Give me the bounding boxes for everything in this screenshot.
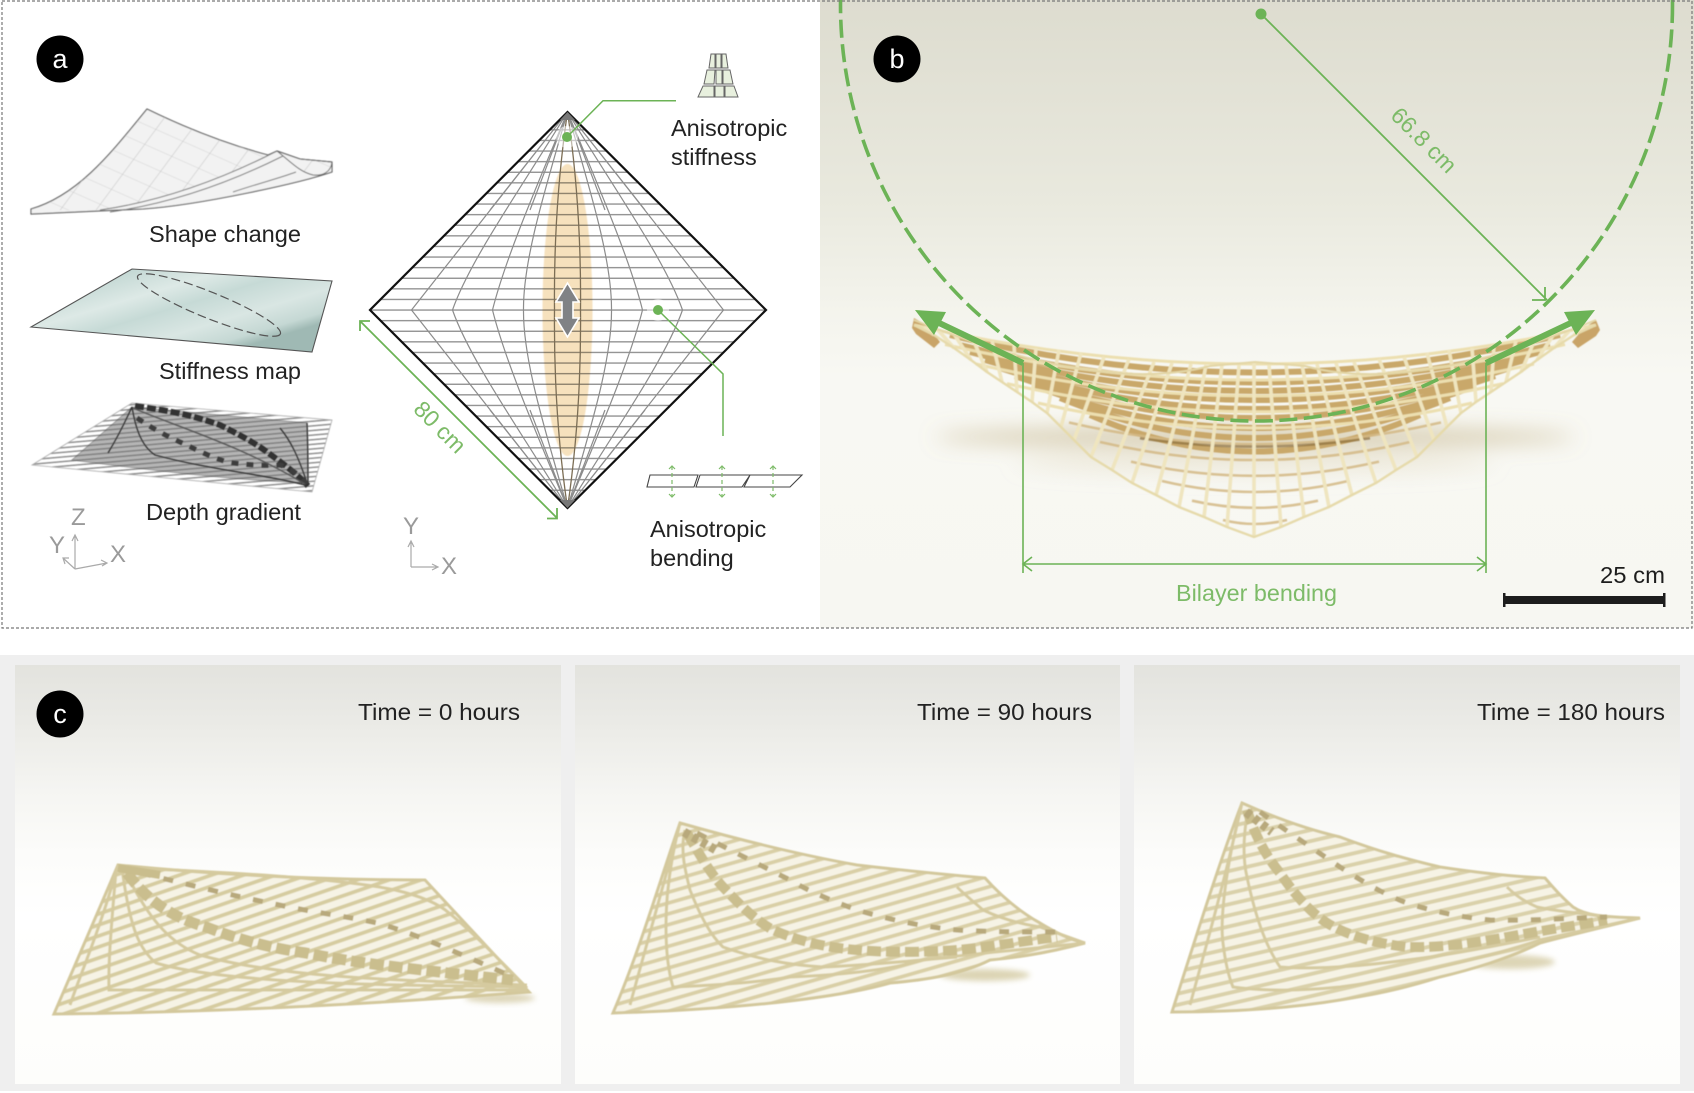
2D axes	[403, 513, 457, 580]
shape change surface	[31, 109, 332, 214]
2D axes: Y	[403, 513, 419, 540]
panel a heading badge	[36, 36, 84, 82]
shape change label: Shape change	[149, 221, 301, 247]
diamond outline	[370, 112, 766, 508]
centre dot	[1256, 8, 1266, 20]
3D axes: Y	[49, 532, 65, 559]
big arrow right	[1486, 310, 1595, 363]
80 cm label: 80 cm	[409, 396, 471, 458]
leader to anisotropic stiffness	[556, 101, 676, 148]
dashed bending circle	[840, 0, 1672, 421]
time 180 label: Time = 180 hours	[1477, 699, 1665, 725]
stiffness map surface	[31, 264, 332, 352]
big arrow left	[915, 310, 1023, 363]
longitudinal curves	[412, 112, 724, 508]
radius line with arrow	[1261, 14, 1547, 300]
icon: tapered cell grid	[698, 54, 738, 97]
depth gradient label: Depth gradient	[146, 499, 301, 525]
panel c heading badge: c	[53, 699, 67, 729]
panel b heading badge: b	[889, 44, 905, 74]
panel c heading badge	[36, 690, 84, 738]
panel a heading badge: a	[52, 44, 68, 74]
bilayer label: Bilayer bending	[1176, 580, 1337, 606]
stiffness map label: Stiffness map	[159, 358, 301, 384]
panel c band	[0, 655, 1694, 1091]
shadow beneath lattice	[935, 427, 1575, 474]
leader to anisotropic bending	[647, 299, 723, 436]
2D axes: X	[441, 553, 457, 580]
photo: time 180	[1134, 665, 1680, 1084]
lattice	[912, 318, 1600, 537]
stiff zone tint	[542, 164, 592, 456]
depth gradient surface	[32, 403, 332, 492]
bilayer dimension arrow	[1023, 363, 1486, 573]
photo: time 90	[575, 665, 1120, 1084]
photo: time 0	[15, 665, 561, 1084]
white halo around stiff zone	[531, 150, 603, 470]
scale bar	[1503, 593, 1666, 607]
panel b heading badge	[874, 36, 920, 82]
3D axes: X	[110, 541, 126, 568]
80 cm dimension arrow	[360, 321, 557, 518]
diamond lattice plan	[370, 112, 766, 508]
radius label: 66.8 cm	[1386, 102, 1462, 178]
anisotropic stiffness label: stiffness	[671, 144, 757, 170]
3D axes: Z	[71, 504, 86, 531]
time 0 label: Time = 0 hours	[358, 699, 520, 725]
photo panel b: hammock lattice	[820, 0, 1694, 628]
icon: bending cells with arrows	[647, 466, 802, 497]
tip fills	[560, 112, 575, 508]
double arrow	[556, 283, 579, 337]
anisotropic bending label: bending	[650, 545, 734, 571]
scale label: 25 cm	[1600, 562, 1665, 588]
anisotropic bending label: Anisotropic	[650, 516, 766, 542]
dashed frame	[2, 1, 1692, 628]
anisotropic stiffness label: Anisotropic	[671, 115, 787, 141]
3D axes	[49, 504, 126, 569]
time 90 label: Time = 90 hours	[917, 699, 1092, 725]
inner stiff-zone curves	[554, 112, 581, 508]
